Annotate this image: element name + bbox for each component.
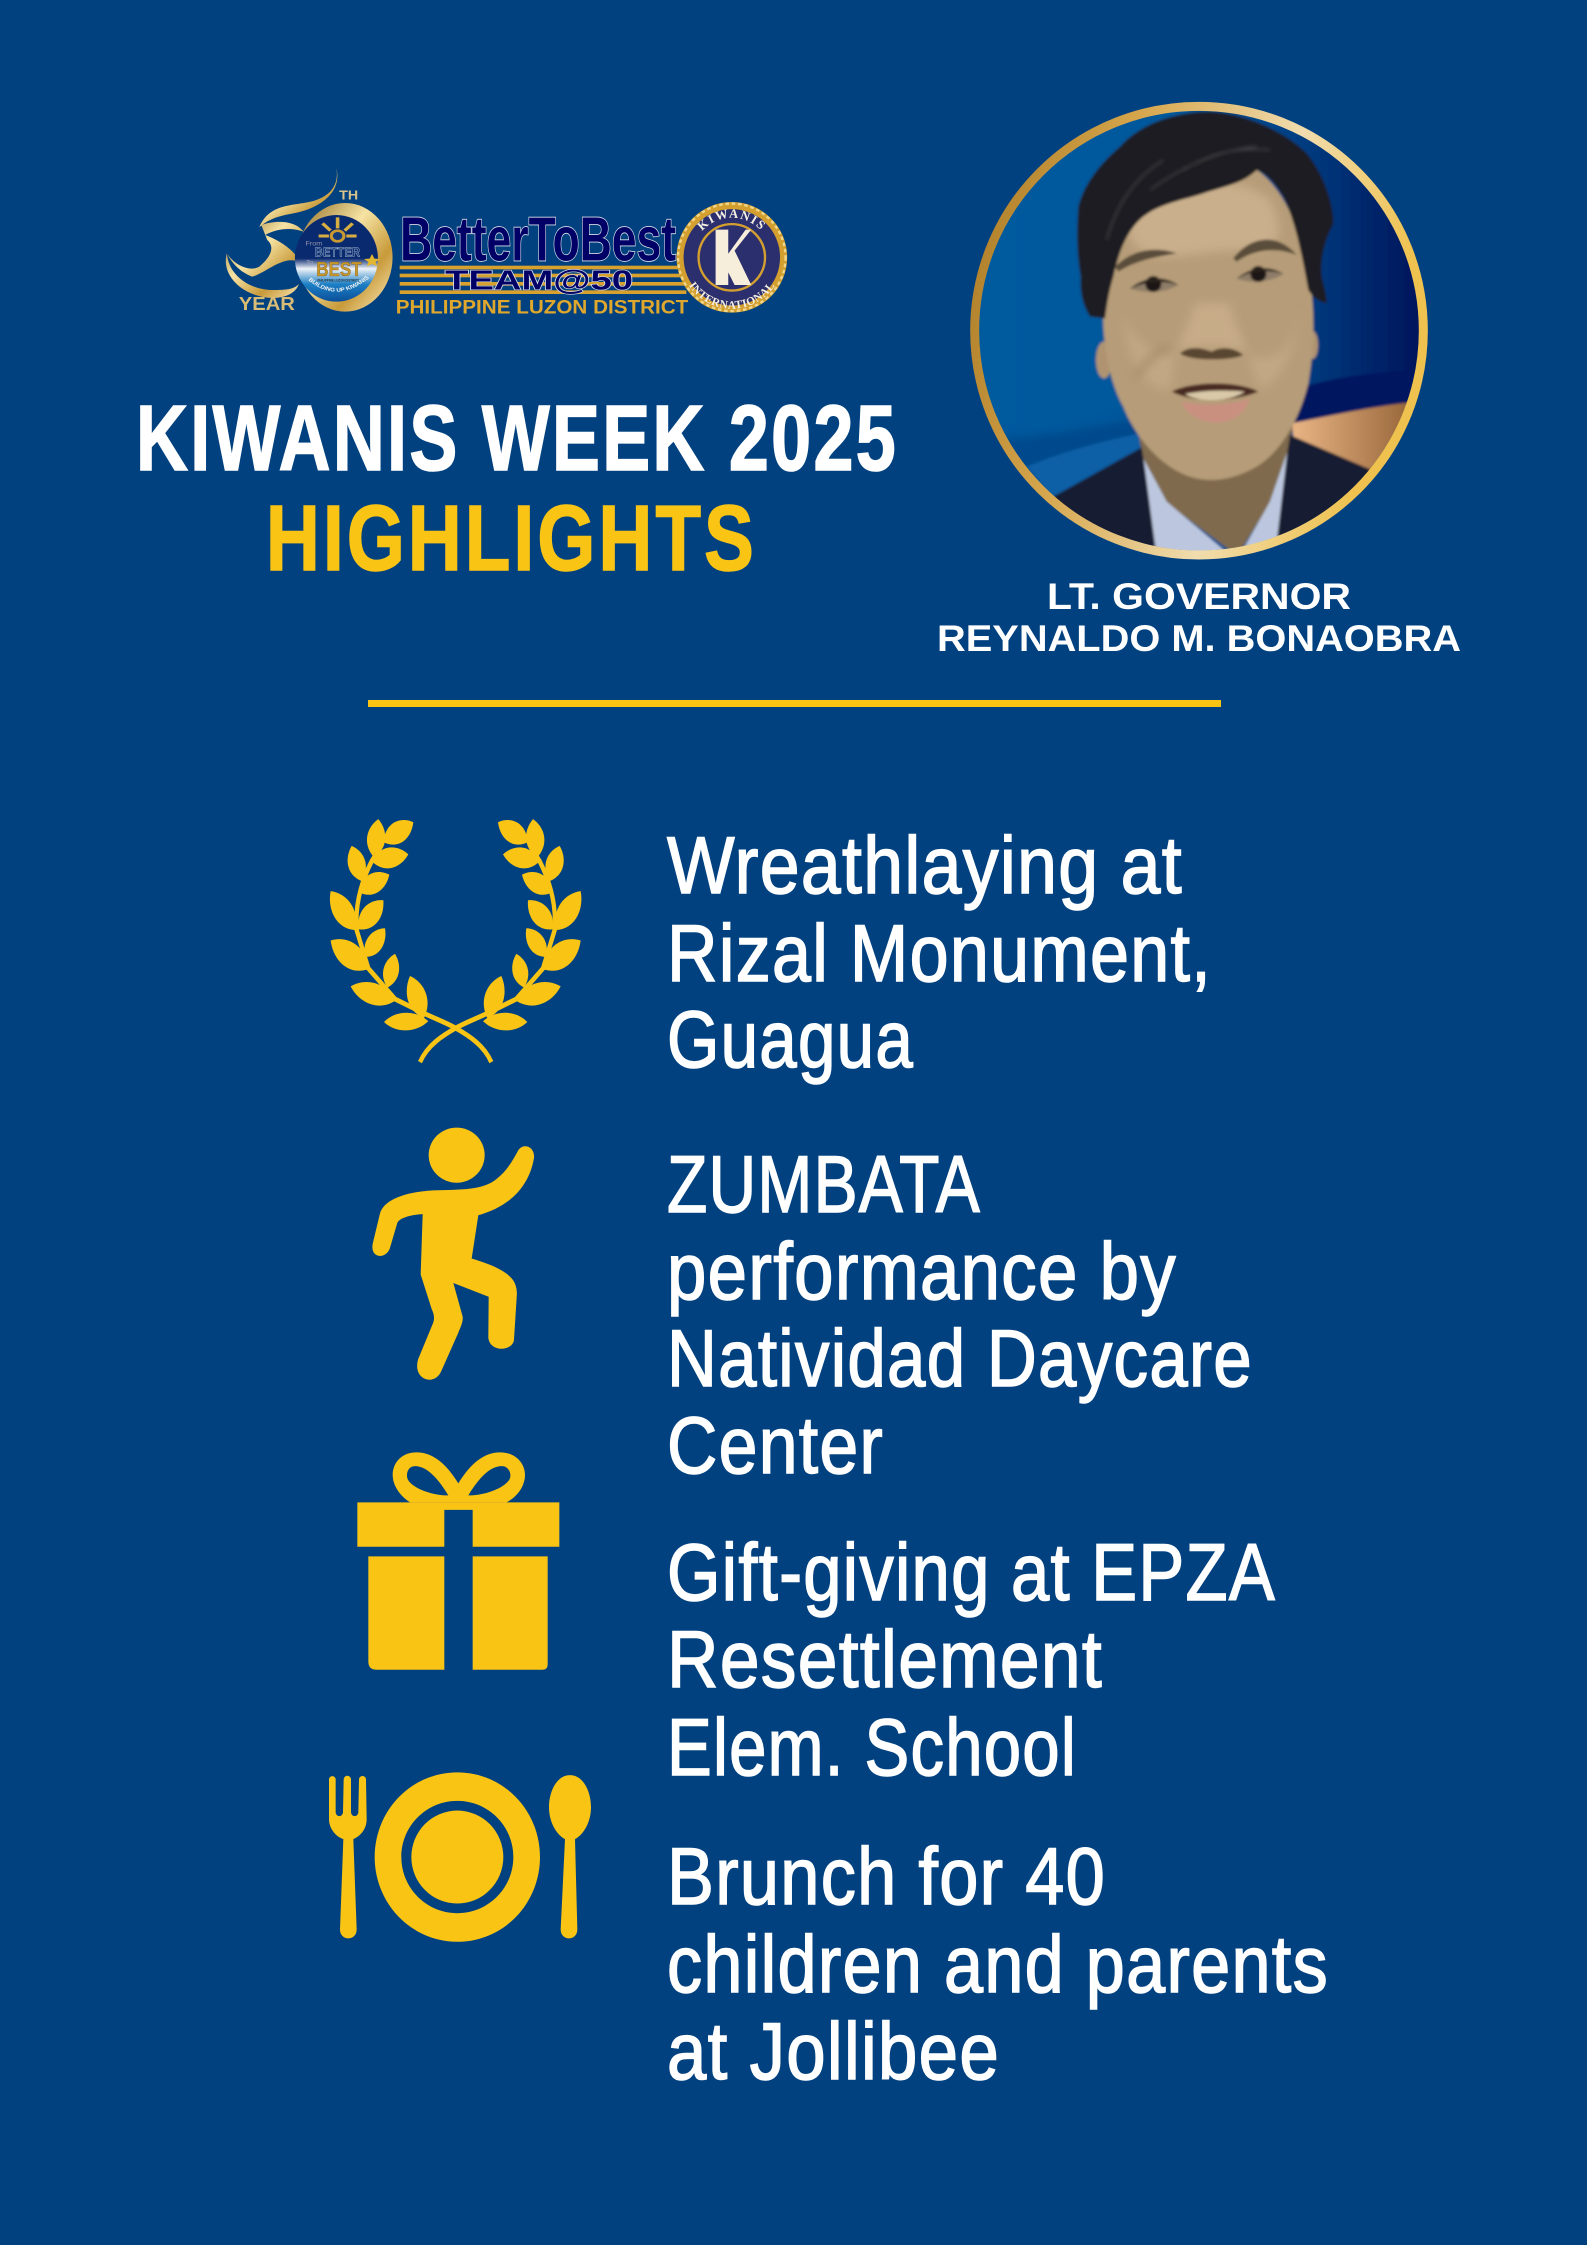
- item: Zumbata: ZUMBATA: [667, 1140, 981, 1230]
- item: Zumbata: performance by: [667, 1227, 1177, 1317]
- item: brunch: Brunch for 40: [667, 1832, 1106, 1922]
- face: [1103, 162, 1313, 480]
- caption: Lt. Governor name: [937, 576, 1461, 659]
- logo stripes: [400, 266, 686, 294]
- hair: [1077, 112, 1333, 318]
- infographic canvas: [140, 102, 1460, 2081]
- logo wordmark: BetterToBest: [400, 205, 676, 274]
- item: gift-giving: Elem. School: [667, 1703, 1077, 1793]
- neck: [1137, 423, 1293, 552]
- emblem: Kiwanis International seal: KIWANIS: [696, 209, 766, 231]
- highlight list: [667, 821, 1329, 2097]
- item: brunch: [667, 1832, 1329, 2097]
- portrait of Lt. Governor: [963, 97, 1437, 567]
- emblem: 50th year gold seal: TH: [339, 188, 358, 203]
- emblem: 50th year gold seal: To: [306, 259, 314, 266]
- emblem: 50th year gold seal: YEAR: [239, 294, 295, 315]
- logo team line: TEAM@50: [445, 264, 633, 296]
- item: wreathlaying: Wreathlaying at: [667, 821, 1183, 911]
- item: wreathlaying: Guagua: [667, 995, 914, 1085]
- emblem: 50th year gold seal: PHILIPPINE LUZON DISTRICT: [317, 278, 359, 282]
- logo district line: PHILIPPINE LUZON DISTRICT: [396, 297, 688, 318]
- emblem: Kiwanis International seal: [676, 202, 788, 313]
- emblem: 50th year gold seal: BETTER: [315, 245, 360, 259]
- title: [136, 386, 898, 590]
- shirt collar: [1143, 452, 1287, 557]
- suit: [1054, 434, 1370, 546]
- emblem: 50th year gold seal: From: [306, 241, 323, 247]
- ears: [1096, 342, 1112, 378]
- logo: Better To Best Team@50 lockup: [226, 168, 788, 318]
- title line 2: HIGHLIGHTS: [266, 486, 757, 590]
- emblem: 50th year gold seal: BUILDING UP KIWANIS: [308, 276, 369, 292]
- eyebrows: [1115, 250, 1177, 272]
- mouth: [1172, 384, 1258, 422]
- item: wreathlaying: [667, 821, 1212, 1085]
- emblem: 50th year gold seal: BEST: [316, 257, 362, 281]
- item: wreathlaying: Rizal Monument,: [667, 909, 1212, 999]
- item: gift-giving: Gift-giving at EPZA: [667, 1528, 1276, 1618]
- eyes: [1131, 280, 1178, 292]
- item: Zumbata: Natividad Daycare: [667, 1314, 1253, 1404]
- icon: dancing person: [372, 1128, 534, 1380]
- emblem: Kiwanis International seal: INTERNATIONAL: [688, 281, 774, 309]
- item: Zumbata: [667, 1140, 1253, 1491]
- portrait gold ring: [975, 106, 1423, 555]
- portrait swooshes: [1007, 420, 1136, 480]
- emblem: 50th year gold seal: [226, 168, 393, 315]
- icon: laurel wreath: [322, 813, 589, 1062]
- item: gift-giving: Resettlement: [667, 1615, 1103, 1705]
- caption line 1: LT. GOVERNOR: [1047, 576, 1351, 617]
- item: Zumbata: Center: [667, 1401, 884, 1491]
- divider line: [368, 700, 1221, 707]
- item: gift-giving: [667, 1528, 1276, 1793]
- icon: gift box: [357, 1452, 559, 1670]
- title line 1: KIWANIS WEEK 2025: [136, 386, 898, 490]
- nose: [1181, 304, 1242, 350]
- icon: plate with fork and spoon: [329, 1772, 591, 1942]
- item: brunch: at Jollibee: [667, 2007, 1000, 2097]
- item: brunch: children and parents: [667, 1920, 1329, 2010]
- caption line 2: REYNALDO M. BONAOBRA: [937, 618, 1461, 659]
